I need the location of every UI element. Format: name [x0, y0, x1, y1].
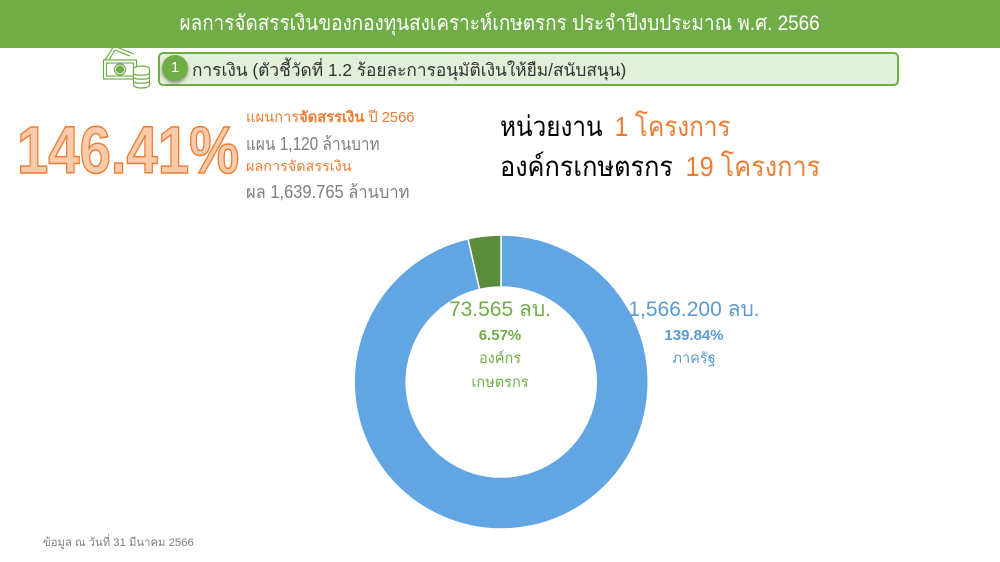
green category label: องค์กร [479, 351, 521, 367]
result label: ผลการจัดสรรเงิน [246, 159, 352, 175]
section heading bar [158, 52, 899, 86]
number badge [162, 55, 188, 81]
number badge: 1 [171, 59, 179, 76]
title banner: ผลการจัดสรรเงินของกองทุนสงเคราะห์เกษตรกร ประจำปีงบประมาณ พ.ศ. 2566 [180, 12, 820, 35]
result value: ผล 1,639.765 ล้านบาท [246, 182, 410, 202]
farmer organization projects: องค์กรเกษตรกร 19 โครงการ [500, 151, 820, 182]
title banner [0, 0, 1000, 48]
blue amount label: 1,566.200 ลบ. [628, 298, 760, 321]
green percent: 6.57% [479, 327, 521, 344]
section heading bar: การเงิน (ตัวชี้วัดที่ 1.2 ร้อยละการอนุมัติเงินให้ยืม/สนับสนุน) [192, 60, 626, 80]
plan label: แผนการจัดสรรเงิน ปี 2566 [246, 110, 414, 126]
icon: money and coins [102, 48, 150, 89]
green category label [471, 350, 529, 391]
blue segment [354, 235, 648, 529]
green category label: เกษตรกร [471, 375, 529, 391]
data source note: ข้อมูล ณ วันที่ 31 มีนาคม 2566 [43, 537, 194, 549]
blue category label: ภาครัฐ [672, 351, 716, 367]
plan value: แผน 1,120 ล้านบาท [246, 134, 380, 154]
green amount label: 73.565 ลบ. [449, 298, 551, 321]
big percentage: 146.41% [17, 113, 239, 188]
blue percent: 139.84% [664, 327, 724, 344]
green segment [468, 235, 501, 290]
agency projects: หน่วยงาน 1 โครงการ [500, 111, 731, 142]
